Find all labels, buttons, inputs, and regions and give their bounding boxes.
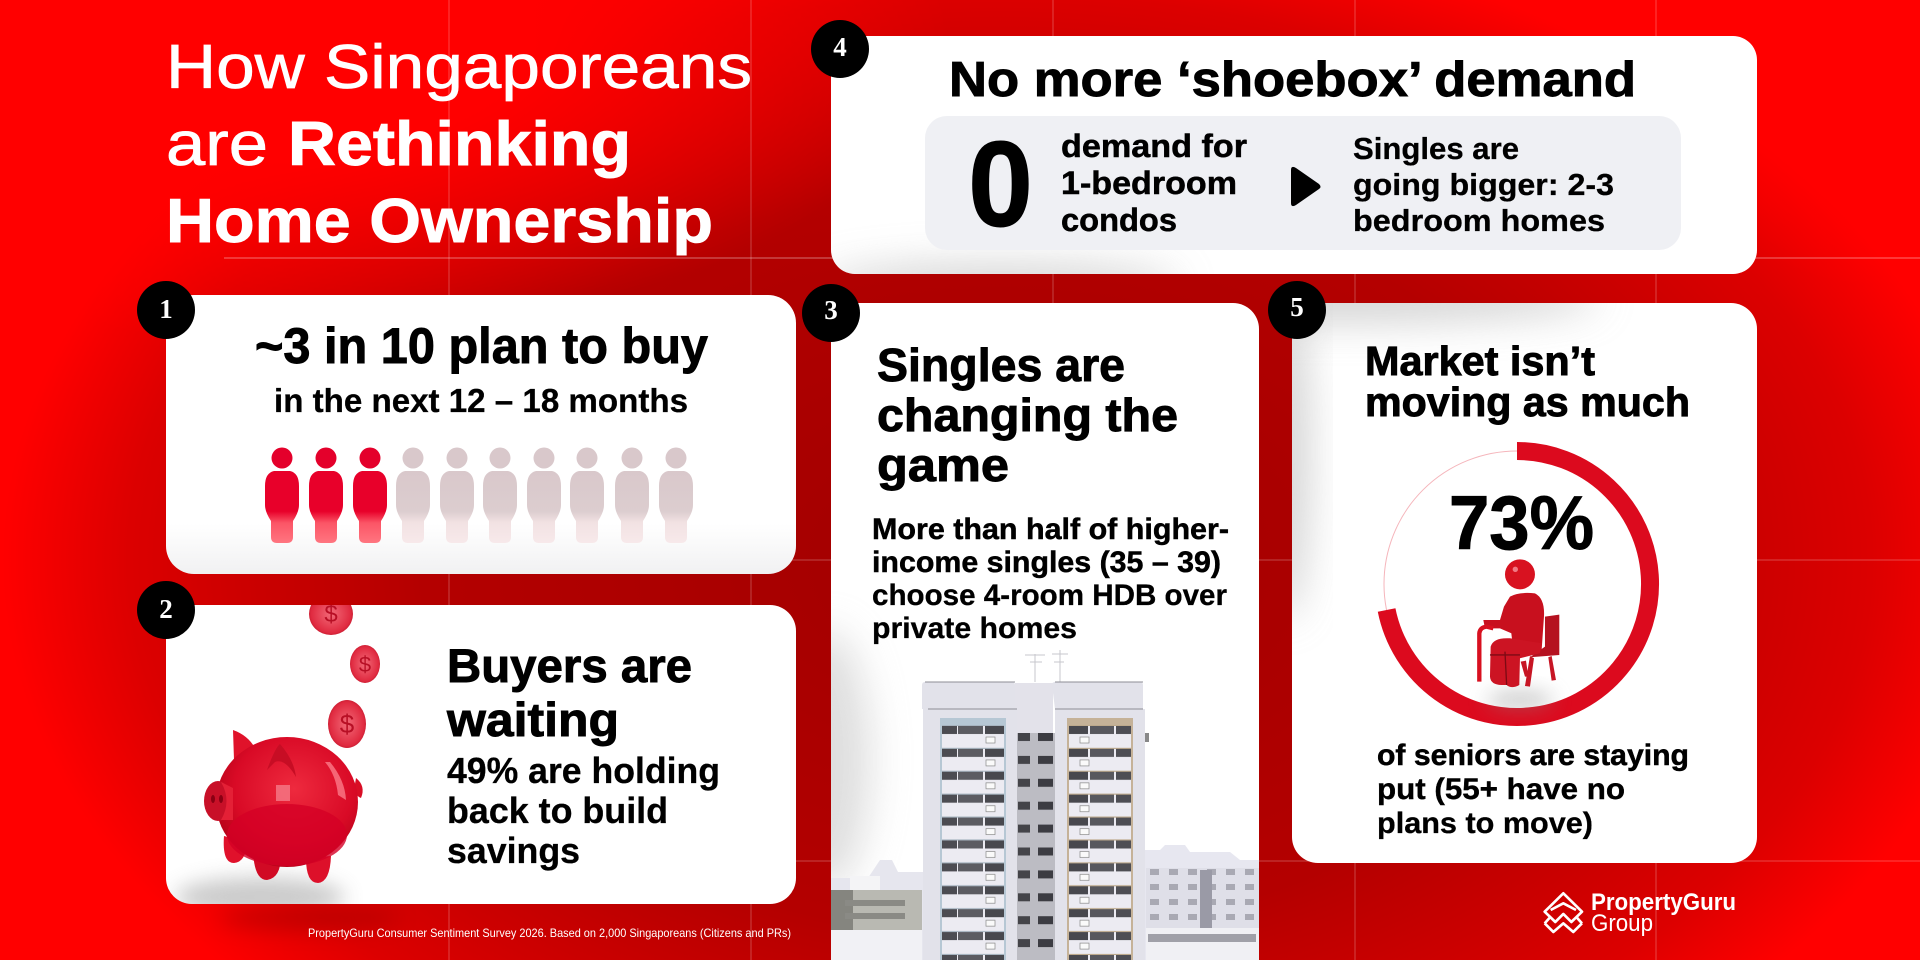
heading: changing the bbox=[877, 389, 1178, 441]
badge 4 bbox=[811, 20, 869, 78]
text: seniors staying put: put (55+ have no bbox=[1377, 773, 1625, 806]
body text: private homes bbox=[872, 612, 1077, 645]
panel 2: buyers are waiting bbox=[166, 593, 796, 930]
image: HDB tower block bbox=[831, 650, 1259, 960]
text: seniors staying put: plans to move) bbox=[1377, 807, 1593, 840]
heading: Market isn’t bbox=[1365, 338, 1595, 384]
heading bbox=[877, 339, 1178, 491]
panel 1: plan to buy bbox=[166, 295, 796, 574]
logo icon bbox=[1545, 893, 1582, 932]
badge 5 bbox=[1268, 281, 1326, 339]
text: 49 percent: back to build bbox=[447, 790, 668, 831]
footnote: PropertyGuru Consumer Sentiment Survey 2026. Based on 2,000 Singaporeans (Citizens and PRs) bbox=[308, 926, 791, 940]
text: singles going bigger bbox=[1353, 131, 1614, 238]
pictogram: ten people, three highlighted bbox=[265, 448, 693, 543]
text: demand for 1-bedroom condos: 1-bedroom bbox=[1061, 165, 1237, 201]
icon: piggy bank bbox=[204, 730, 363, 883]
title: How Singaporeans bbox=[166, 33, 752, 102]
panel 5: market not moving bbox=[1292, 303, 1757, 863]
badge 2 bbox=[137, 581, 195, 639]
logo: PropertyGuru Group: Group bbox=[1591, 910, 1653, 937]
stat: 73 percent: 73% bbox=[1449, 481, 1594, 566]
badge 3 bbox=[802, 284, 860, 342]
icon: coins: $ bbox=[359, 652, 371, 677]
text: seniors staying put: of seniors are staying bbox=[1377, 739, 1689, 772]
title: Home Ownership bbox=[166, 187, 713, 256]
heading: game bbox=[877, 439, 1009, 491]
badge 1 bbox=[137, 281, 195, 339]
badge 5: 5 bbox=[1290, 292, 1304, 322]
body text: income singles (35 – 39) bbox=[872, 546, 1221, 579]
body text bbox=[872, 513, 1229, 645]
title bbox=[166, 33, 752, 256]
text: demand for 1-bedroom condos: condos bbox=[1061, 202, 1177, 238]
big zero: 0 bbox=[968, 116, 1033, 252]
text: singles going bigger: Singles are bbox=[1353, 131, 1519, 166]
body text: More than half of higher- bbox=[872, 513, 1229, 546]
heading: No more ‘shoebox’ demand bbox=[949, 53, 1636, 107]
icon: coins bbox=[309, 593, 380, 748]
text: singles going bigger: bedroom homes bbox=[1353, 203, 1605, 238]
heading bbox=[1365, 338, 1690, 425]
panel 2: buyers are waiting: waiting bbox=[446, 693, 619, 746]
text: seniors staying put bbox=[1377, 739, 1689, 840]
badge 1: 1 bbox=[159, 294, 173, 324]
logo wordmark: PropertyGuru bbox=[1591, 889, 1736, 916]
text: 49 percent: savings bbox=[447, 830, 580, 871]
logo: PropertyGuru Group bbox=[1545, 889, 1736, 937]
text: demand for 1-bedroom condos: demand for bbox=[1061, 128, 1247, 164]
panel 3: singles bbox=[831, 303, 1259, 960]
badge 4: 4 bbox=[833, 32, 847, 62]
arrow bbox=[1291, 167, 1320, 206]
heading: 3 in 10: ~3 in 10 plan to buy bbox=[255, 318, 708, 374]
title: Rethinking bbox=[288, 110, 631, 179]
subheading: timeframe: in the next 12 – 18 months bbox=[274, 382, 688, 419]
badge 2: 2 bbox=[159, 594, 173, 624]
title: are bbox=[166, 110, 268, 179]
inset panel bbox=[925, 116, 1681, 252]
text: singles going bigger: going bigger: 2-3 bbox=[1353, 167, 1614, 202]
text: buyers are waiting: Buyers are bbox=[447, 639, 692, 692]
body text: choose 4-room HDB over bbox=[872, 579, 1227, 612]
icon: seated senior bbox=[1479, 559, 1559, 687]
panel 4: shoebox demand bbox=[831, 36, 1757, 274]
donut chart: 73 percent bbox=[1384, 451, 1650, 717]
icon: coins: $ bbox=[340, 709, 355, 739]
badge 3: 3 bbox=[824, 295, 838, 325]
icon: coins: $ bbox=[324, 601, 338, 628]
heading: Singles are bbox=[877, 339, 1125, 391]
heading: moving as much bbox=[1365, 379, 1690, 425]
text: 49 percent bbox=[447, 750, 720, 871]
text: 49 percent: 49% are holding bbox=[447, 750, 720, 791]
text: demand for 1-bedroom condos bbox=[1061, 128, 1247, 238]
